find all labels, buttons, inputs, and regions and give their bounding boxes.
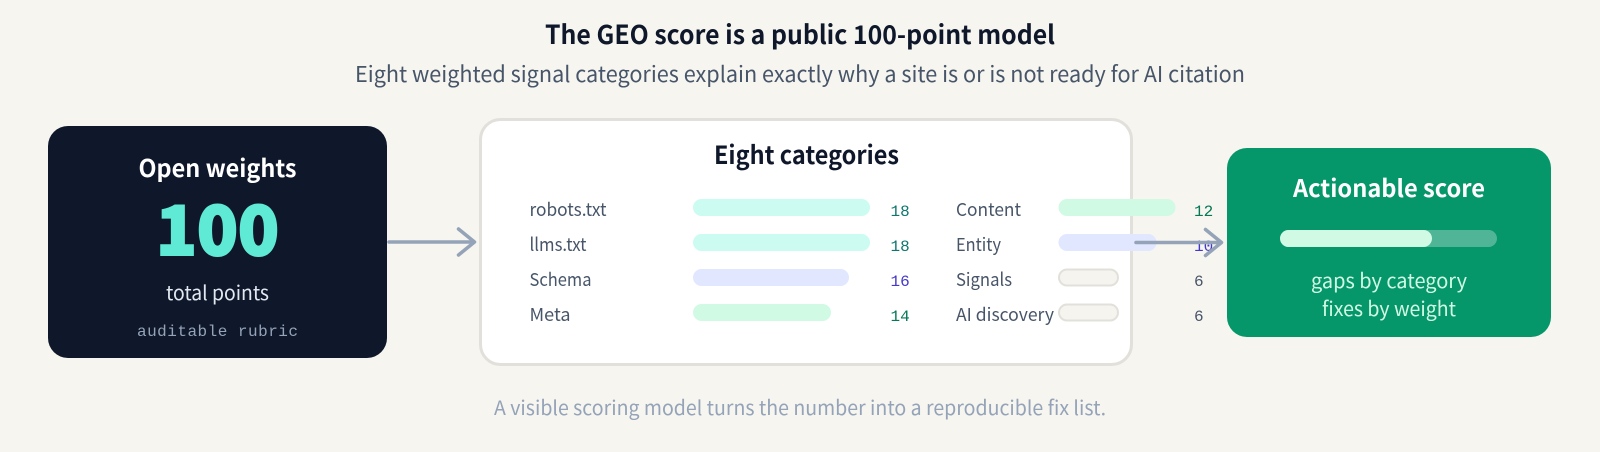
row: Entity: Entity xyxy=(956,231,1002,257)
progress bar xyxy=(1280,230,1497,247)
row: Signals: 6 xyxy=(1194,273,1204,291)
row: Content: 12 xyxy=(1194,203,1213,221)
big number 100: 100 xyxy=(156,176,279,275)
open weights heading: Open weights xyxy=(138,149,297,184)
row: Content xyxy=(956,196,1213,222)
panel: actionable score xyxy=(1227,148,1551,337)
row: AI discovery xyxy=(956,301,1204,327)
eight categories heading: Eight categories xyxy=(714,136,899,172)
row: robots.txt: robots.txt xyxy=(530,196,607,222)
arrow: categories to score xyxy=(1136,230,1222,256)
auditable rubric note: auditable rubric xyxy=(137,323,298,341)
row: Schema: Schema xyxy=(530,266,592,292)
gaps and fixes text: fixes by weight xyxy=(1322,293,1456,322)
total points label: total points xyxy=(166,277,269,306)
row: AI discovery: AI discovery xyxy=(956,301,1055,327)
row: robots.txt: 18 xyxy=(890,203,910,221)
arrow: open weights to categories xyxy=(389,229,474,255)
footer caption: A visible scoring model turns the number into a reproducible fix list. xyxy=(494,392,1106,421)
row: Meta: 14 xyxy=(890,308,910,326)
row: Meta xyxy=(530,301,910,327)
row: Schema xyxy=(530,266,910,292)
row: llms.txt: llms.txt xyxy=(530,231,587,257)
row: robots.txt xyxy=(530,196,910,222)
row: Content: Content xyxy=(956,196,1021,222)
row: Entity xyxy=(956,231,1213,257)
row: AI discovery: 6 xyxy=(1194,308,1204,326)
subtitle: Eight weighted signal categories explain exactly why a site is or is not ready for AI citation xyxy=(355,57,1245,89)
row: Meta: Meta xyxy=(530,301,570,327)
row: Signals xyxy=(956,266,1204,292)
panel: eight categories xyxy=(480,120,1213,364)
row: Signals: Signals xyxy=(956,266,1012,292)
row: llms.txt xyxy=(530,231,910,257)
title: The GEO score is a public 100-point model xyxy=(545,15,1055,52)
row: Entity: 10 xyxy=(1194,238,1213,256)
gaps and fixes text xyxy=(1311,265,1468,322)
actionable score heading: Actionable score xyxy=(1292,169,1485,204)
gaps and fixes text: gaps by category xyxy=(1311,265,1468,294)
row: Schema: 16 xyxy=(890,273,910,291)
row: llms.txt: 18 xyxy=(890,238,910,256)
panel: open weights xyxy=(48,126,387,358)
